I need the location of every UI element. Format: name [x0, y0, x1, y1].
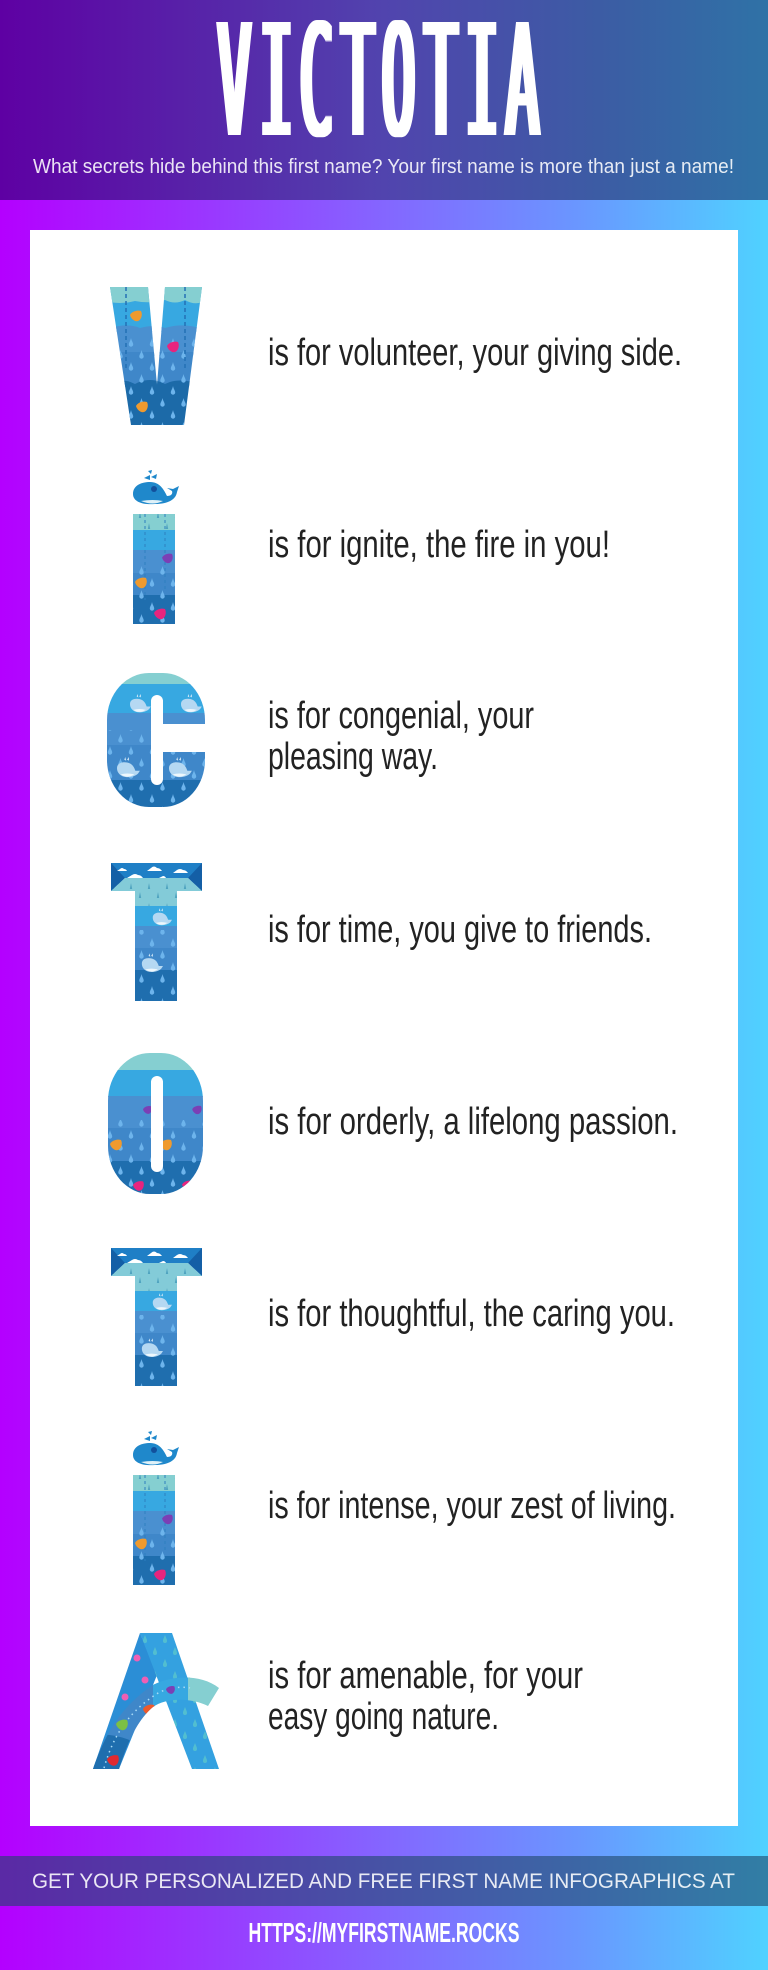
icon: letter O: [105, 1053, 205, 1194]
text: A row: [268, 1655, 583, 1738]
icon: letter C: [105, 673, 207, 807]
footer band: [0, 1856, 768, 1906]
text: C row: [268, 695, 534, 778]
icon: whale above i: [133, 470, 179, 504]
footer url: HTTPS://MYFIRSTNAME.ROCKS: [248, 1917, 520, 1948]
text: C row: pleasing way.: [268, 736, 438, 778]
icon: letter T (second): [111, 1248, 202, 1386]
text: T row: is for time, you give to friends.: [268, 909, 652, 951]
text: C row: is for congenial, your: [268, 695, 534, 737]
icon: letter T: [111, 863, 202, 1001]
icon: letter V: [110, 287, 202, 425]
header band: [0, 0, 768, 200]
panel: letters: [30, 230, 738, 1826]
icon: whale above second i: [133, 1431, 179, 1465]
subtitle: What secrets hide behind this first name? Your first name is more than just a name!: [33, 156, 734, 178]
text: I row: is for ignite, the fire in you!: [268, 524, 610, 566]
text: A row: is for amenable, for your: [268, 1655, 583, 1697]
text: A row: easy going nature.: [268, 1696, 499, 1738]
icon: letter i: [133, 514, 175, 624]
icon: letter A: [90, 1633, 223, 1770]
footer call to action: GET YOUR PERSONALIZED AND FREE FIRST NAME INFOGRAPHICS AT: [32, 1870, 735, 1893]
icon: letter i (second): [133, 1475, 175, 1585]
icon: fish: [130, 311, 142, 321]
